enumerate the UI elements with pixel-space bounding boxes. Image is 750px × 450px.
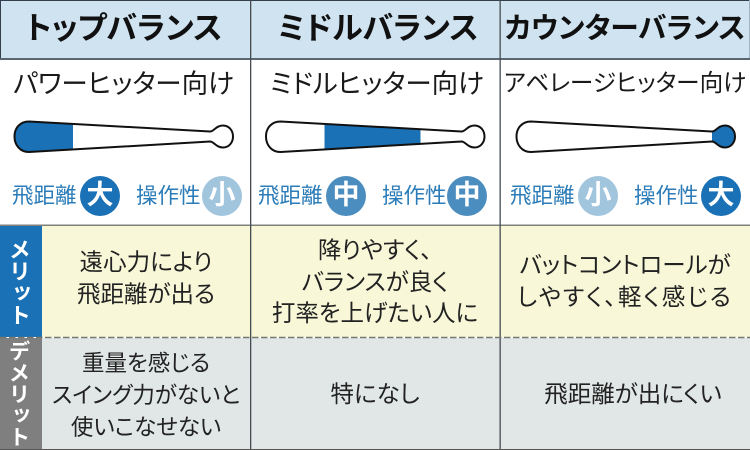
merit text: counter balance: バットコントロールが <box>519 252 731 278</box>
row label: merit <box>0 226 42 337</box>
rating: small: 小 <box>208 180 236 210</box>
rating: medium <box>326 176 366 216</box>
label: control, counter: 操作性 <box>634 184 699 208</box>
row label: merit: メリット <box>6 238 31 326</box>
subheading: power hitter: パワーヒッター向け <box>13 69 234 99</box>
merit text: middle balance: 打率を上げたい人に <box>272 300 478 326</box>
rating: medium: 中 <box>332 180 360 210</box>
rating: small: 小 <box>584 180 612 210</box>
demerit text: top balance: 使いこなせない <box>71 415 221 440</box>
rating: medium <box>447 176 487 216</box>
label: control, top: 操作性 <box>136 184 201 208</box>
rating: small <box>202 176 242 216</box>
bat: middle balance <box>265 120 486 153</box>
label: distance, counter: 飛距離 <box>510 184 575 208</box>
label: distance, middle: 飛距離 <box>258 184 323 208</box>
heading: counter balance: カウンターバランス <box>505 13 745 45</box>
subheading: middle hitter: ミドルヒッター向け <box>270 69 484 99</box>
demerit row background <box>42 338 750 450</box>
bat: top balance <box>14 120 234 153</box>
bat diagrams <box>14 120 736 153</box>
merit text: top balance: 遠心力により <box>80 249 212 275</box>
label: control, middle: 操作性 <box>382 184 447 208</box>
merit text: counter balance <box>517 252 733 310</box>
rating: large: 大 <box>86 180 114 210</box>
merit text: top balance: 飛距離が出る <box>77 280 215 306</box>
demerit text: counter balance: 飛距離が出にくい <box>544 381 722 407</box>
row label: demerit <box>0 338 42 450</box>
bat: counter balance <box>516 120 736 153</box>
demerit text: middle balance: 特になし <box>330 381 420 407</box>
heading: top balance: トップバランス <box>26 11 222 46</box>
rating: large <box>701 176 741 216</box>
rating: medium: 中 <box>454 180 480 210</box>
rating: large: 大 <box>708 180 734 210</box>
heading: middle balance: ミドルバランス <box>278 11 478 46</box>
demerit text: top balance <box>52 351 240 440</box>
demerit text: top balance: 重量を感じる <box>82 351 210 376</box>
merit text: middle balance <box>272 237 478 326</box>
merit text: middle balance: 降りやすく、 <box>318 237 432 263</box>
row label: demerit: デメリット <box>6 340 30 448</box>
rating: small <box>578 176 618 216</box>
merit row background <box>42 226 750 337</box>
rating: large <box>80 176 120 216</box>
label: distance, top: 飛距離 <box>12 184 77 208</box>
merit text: top balance <box>77 249 215 306</box>
merit text: middle balance: バランスが良く <box>302 268 448 294</box>
header band <box>0 0 750 59</box>
subheading: average hitter: アベレージヒッター向け <box>504 71 746 97</box>
demerit text: top balance: スイング力がないと <box>52 383 240 408</box>
merit text: counter balance: しやすく、軽く感じる <box>517 284 733 310</box>
